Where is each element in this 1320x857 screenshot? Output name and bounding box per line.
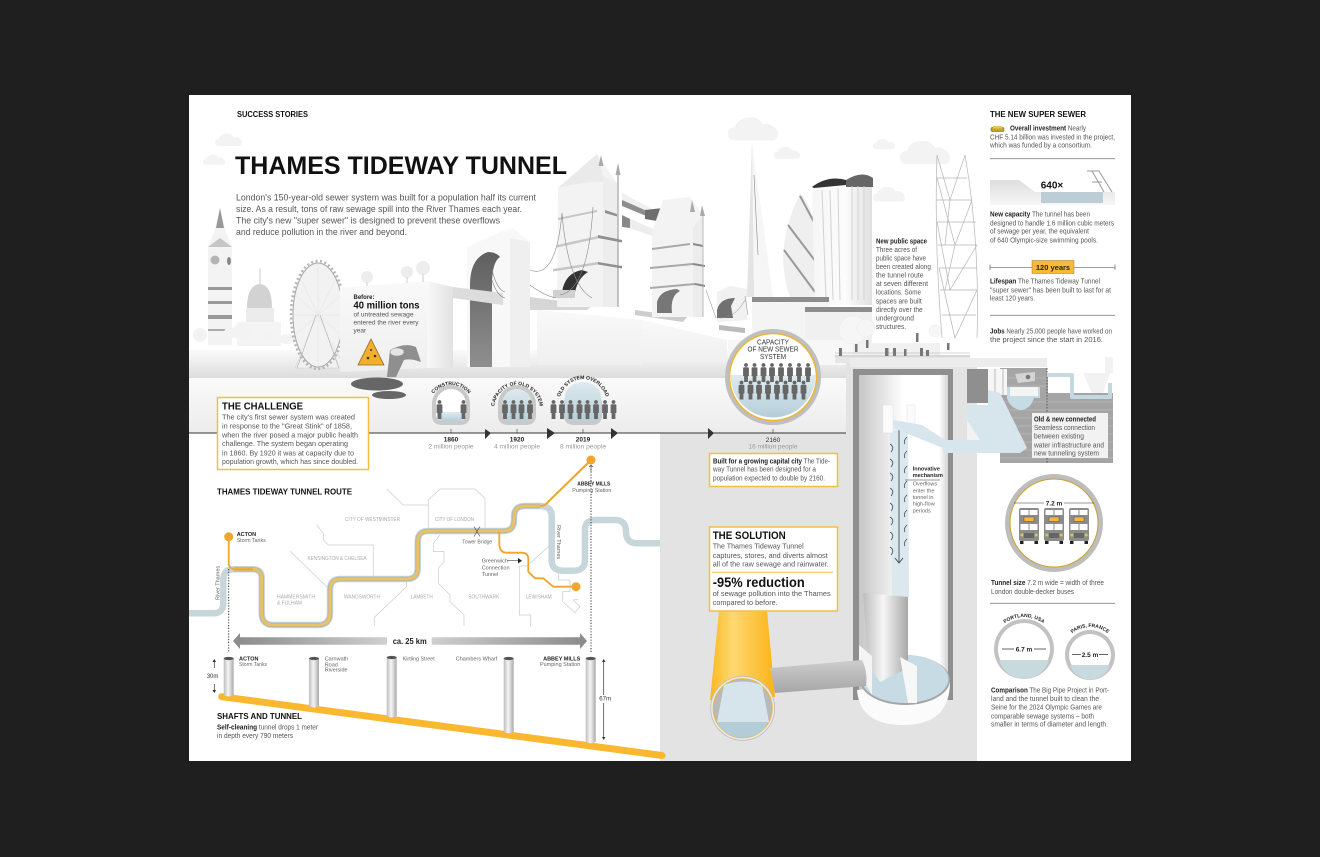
callout: new public space: at seven different <box>876 281 928 288</box>
tunnel profile: shaft labels: Road <box>325 662 338 668</box>
callout: old and new connected: water infrastructure and <box>1033 442 1104 449</box>
tunnel profile: shaft labels: ACTON <box>239 657 258 663</box>
distance arrow: ca. 25 km <box>233 633 587 649</box>
section: solution background <box>660 363 977 761</box>
icon: Tower Bridge marker <box>474 526 480 536</box>
milestone: 1860 construction: CONSTRUCTION <box>432 382 471 394</box>
route map: borough names: CITY OF LONDON <box>435 517 474 523</box>
public square platform with people <box>835 333 970 363</box>
route map: terminus dots <box>224 456 595 591</box>
callout: old and new connected: new tunneling system <box>1034 451 1099 458</box>
dimension: 30m <box>207 659 218 693</box>
page background <box>189 95 1131 761</box>
text: overall investment: CHF 5.14 billion was invested in the project, <box>990 134 1115 141</box>
white pipes <box>988 369 1007 395</box>
callout: new public space: the tunnel route <box>876 273 924 280</box>
divider <box>990 159 1115 603</box>
icon: gold bars <box>991 126 1004 132</box>
callout: innovative mechanism <box>905 466 943 514</box>
river base blocks <box>537 310 727 365</box>
Tower Bridge north tower <box>553 154 622 307</box>
milestone: 2160 capacity of new sewer system: SYSTEM <box>760 352 786 361</box>
text: lifespan: "super sewer" has been built to last for at <box>990 287 1111 294</box>
route map: main tunnel <box>229 460 591 625</box>
text: new capacity <box>990 212 1114 244</box>
callout: new public space: locations. Some <box>876 290 921 297</box>
text: new capacity: of sewage per year, the equivalent <box>990 229 1089 236</box>
route map: borough names: KENSINGTON & CHELSEA <box>308 556 367 562</box>
Tower Bridge south tower <box>650 197 705 317</box>
milestone: 1860 construction <box>428 382 474 450</box>
Tower Bridge walkways <box>622 193 692 238</box>
milestone: 2160 capacity of new sewer system: 16 million people <box>748 444 798 450</box>
ground plane left <box>189 350 849 378</box>
trees by public square <box>839 316 941 344</box>
callout: 40 million tons <box>354 295 420 334</box>
callout: innovative mechanism: tunnel in <box>913 495 933 501</box>
callout: new public space: public space have <box>876 256 926 263</box>
milestone: 2160 capacity of new sewer system: 2160 <box>766 437 781 444</box>
text: new capacity: of 640 Olympic-size swimming pools. <box>990 237 1098 244</box>
callout: old and new connected: Old & new connected <box>1034 416 1096 423</box>
panel: the challenge: challenge. The system began operating <box>222 439 348 448</box>
tunnel profile: sloped yellow tunnel <box>222 697 662 756</box>
diagram: Portland pipe <box>994 614 1054 679</box>
distance arrow: ca. 25 km: ca. 25 km <box>393 636 427 646</box>
dimension dashes <box>229 466 591 652</box>
panel: the challenge: in response to the "Great Stink" of 1858, <box>222 421 352 430</box>
route map: borough names: LAMBETH <box>411 594 433 600</box>
light band above timeline <box>189 378 849 433</box>
milestone: 1920 capacity of old system: 4 million people <box>494 444 540 450</box>
tunnel profile: shaft labels: ABBEY MILLS <box>543 657 581 663</box>
trees on wall <box>361 261 430 286</box>
icon: St Paul's dome <box>237 268 281 346</box>
icon: Walkie Talkie tower <box>812 174 873 305</box>
text: overall investment: Overall investment Nearly <box>1010 126 1086 133</box>
callout: innovative mechanism: Innovative <box>913 466 940 472</box>
panel: the challenge: THE CHALLENGE <box>222 400 303 412</box>
route map: labels: Connection <box>482 566 510 572</box>
panel: the challenge: when the river posed a major public health <box>221 430 358 439</box>
water column <box>890 430 909 597</box>
route map: labels <box>216 482 611 600</box>
callout: built for a growing capital city: Built for a growing capital city The Tide- <box>713 458 831 465</box>
diagram: Portland pipe: PORTLAND, USA <box>1003 614 1044 624</box>
callout: new public space: Three acres of <box>876 247 917 254</box>
panel: the solution: -95% reduction <box>713 574 805 590</box>
callout: 40 million tons: 40 million tons <box>354 300 420 312</box>
callout: built for a growing capital city: population expected to double by 2160. <box>713 475 825 482</box>
panel: the challenge <box>218 398 368 470</box>
route map: borough names: HAMMERSMITH <box>277 594 315 600</box>
text: comparison: Comparison The Big Pipe Project in Port- <box>991 687 1110 694</box>
icon: pool comparison: 640× <box>1041 181 1063 192</box>
heading: route: THAMES TIDEWAY TUNNEL ROUTE <box>217 486 352 496</box>
intro text <box>236 192 536 238</box>
callout: new public space <box>876 239 931 331</box>
timeline axis <box>189 432 846 434</box>
diagram: Paris pipe: PARIS, FRANCE <box>1070 624 1110 634</box>
tunnel profile: shaft labels: Kirtling Street <box>403 657 435 663</box>
drop-shaft concrete <box>863 593 908 682</box>
route map: borough names: CITY OF WESTMINSTER <box>345 517 400 523</box>
heading: the new super sewer: THE NEW SUPER SEWER <box>990 110 1086 119</box>
text: comparison: comparable sewage systems – both <box>991 713 1094 720</box>
route map: small arrows <box>507 465 593 564</box>
lifespan bar: 120 years: 120 years <box>1036 263 1070 272</box>
milestone: 2019 old system overload: 2019 <box>576 436 591 444</box>
panel: the challenge: The city's first sewer system was created <box>222 412 355 422</box>
dimension: 30m: 30m <box>207 674 218 680</box>
route map: labels: ACTON <box>237 532 256 538</box>
swirl arrows <box>890 437 907 555</box>
panel: the solution: of sewage pollution into the Thames <box>713 589 831 598</box>
trees left <box>193 323 295 344</box>
text: jobs: the project since the start in 2016. <box>990 337 1103 344</box>
icon: sewage outfall and spill <box>351 345 421 399</box>
route map: borough names: & FULHAM <box>277 600 302 606</box>
text: comparison: smaller in terms of diameter and length. <box>991 722 1108 729</box>
callout: 40 million tons: Before: <box>354 295 374 301</box>
text: tunnel size <box>991 580 1104 596</box>
intro text: London's 150-year-old sewer system was built for a population half its current <box>236 192 536 204</box>
milestone: 2160 capacity of new sewer system: OF NEW SEWER <box>748 345 799 354</box>
tunnel profile: shafts <box>224 656 596 743</box>
route map: labels: River Thames <box>216 566 222 600</box>
callout: new public space: underground <box>876 315 914 322</box>
text: jobs <box>990 328 1112 344</box>
text: overall investment: which was funded by a consortium. <box>989 143 1092 150</box>
route map: labels: Tower Bridge <box>462 540 492 546</box>
intro text: and reduce pollution in the river and beyond. <box>236 227 407 238</box>
timeline arrows <box>451 428 773 439</box>
diagram: tunnel size with buses <box>1005 474 1103 572</box>
callout: innovative mechanism: mechanism <box>913 473 943 479</box>
callout: built for a growing capital city <box>710 454 838 486</box>
route map: borough boundaries <box>290 489 580 626</box>
text: new capacity: New capacity The tunnel has been <box>990 212 1090 219</box>
text: tunnel size: Tunnel size 7.2 m wide = width of three <box>991 580 1104 587</box>
panel: the solution: all of the raw sewage and rainwater. <box>713 560 829 569</box>
low river wall block <box>340 281 453 372</box>
callout: 40 million tons: of untreated sewage <box>354 312 414 319</box>
flow arrow <box>898 430 900 562</box>
route map: borough names: WANDSWORTH <box>344 594 380 600</box>
route map: labels: Greenwich <box>482 558 508 564</box>
right white column <box>977 367 1131 761</box>
small approach tower <box>706 286 748 333</box>
icon: pool comparison <box>990 171 1115 205</box>
tunnel profile: shaft labels: Chambers Wharf <box>456 657 498 663</box>
text: tunnel size: London double-decker buses <box>991 589 1074 596</box>
callout: 40 million tons: entered the river every <box>354 320 419 326</box>
Tower Bridge south pier with arch <box>453 228 593 367</box>
illustration: old and new sewer connection <box>893 357 1118 463</box>
text: new capacity: designed to handle 1.6 million cubic meters <box>990 220 1114 227</box>
dark chamber <box>967 369 988 403</box>
diagram: Paris pipe <box>1065 624 1115 680</box>
icon: The Gherkin <box>783 193 817 297</box>
route map: labels: River Thames <box>555 525 561 559</box>
milestone: 1920 capacity of old system: CAPACITY OF OLD SYSTEM <box>491 382 544 406</box>
milestone: 1920 capacity of old system: 1920 <box>510 436 525 444</box>
intro text: size. As a result, tons of raw sewage spill into the River Thames each year. <box>236 204 522 215</box>
icon: warning sign <box>358 339 384 365</box>
callout: new public space: New public space <box>876 239 927 246</box>
milestone: 2160 capacity of new sewer system <box>725 329 821 450</box>
panel: the challenge: in 1860. By 1920 it was at capacity due to <box>222 448 354 457</box>
tunnel profile: shaft labels: Riverside <box>325 668 348 674</box>
connecting gray pipe <box>770 660 866 693</box>
dimension: 67m: 67m <box>599 696 611 702</box>
text: shafts and tunnel: Self-cleaning tunnel drops 1 meter <box>217 724 319 732</box>
route map: borough names: LEWISHAM <box>526 594 552 600</box>
milestone: 1920 capacity of old system <box>491 382 544 450</box>
callout: innovative mechanism: enter the <box>913 488 934 494</box>
incoming sewer pipe <box>893 390 1027 453</box>
icon: Big Ben <box>208 208 232 345</box>
large yellow tunnel section <box>710 611 775 740</box>
route map: labels: Pumping Station <box>572 488 611 494</box>
callout: 40 million tons: year <box>354 327 367 334</box>
illustration: shaft cross-section <box>850 358 1047 725</box>
illustration: London skyline <box>189 142 978 378</box>
panel: the solution: compared to before. <box>713 598 778 607</box>
callout: innovative mechanism: high-flow <box>913 502 935 508</box>
text: shafts and tunnel: in depth every 790 meters <box>217 733 293 740</box>
route map: borough names: SOUTHWARK <box>468 594 500 600</box>
panel: the solution: THE SOLUTION <box>713 530 786 542</box>
tunnel profile: shaft labels: Storm Tanks <box>239 662 267 668</box>
text: lifespan: Lifespan The Thames Tideway Tunnel <box>990 279 1100 286</box>
diagram: Portland pipe: 6.7 m <box>1016 646 1033 654</box>
text: lifespan <box>990 279 1111 303</box>
city podium blocks <box>728 297 872 365</box>
text: comparison: Seine for the 2024 Olympic Games are <box>991 705 1102 712</box>
diagram: Paris pipe: 2.5 m <box>1082 652 1099 659</box>
dimension: 67m <box>599 659 611 740</box>
tunnel profile: shaft labels: Carnwath <box>325 657 348 663</box>
text: comparison <box>991 687 1110 729</box>
text: shafts and tunnel: SHAFTS AND TUNNEL <box>217 711 302 721</box>
text: jobs: Jobs Nearly 25,000 people have worked on <box>990 328 1112 335</box>
text: success stories label: SUCCESS STORIES <box>237 110 309 119</box>
route map: borough names <box>277 517 552 606</box>
panel: the challenge: population growth, which has since doubled. <box>222 457 358 466</box>
milestone: 2160 capacity of new sewer system: CAPACITY <box>757 338 789 346</box>
milestone: 1860 construction: 2 million people <box>428 444 474 450</box>
brick wall <box>1000 368 1113 463</box>
lifespan bar: 120 years <box>990 260 1115 274</box>
callout: new public space: been created along <box>876 264 931 271</box>
icon: The Shard <box>747 142 773 297</box>
diagram: tunnel size with buses: 7.2 m <box>1046 500 1063 508</box>
milestone: 2019 old system overload: 8 million people <box>560 444 606 450</box>
route map: labels: ABBEY MILLS <box>577 482 611 488</box>
callout: built for a growing capital city: way Tunnel has been designed for a <box>712 467 816 474</box>
text: lifespan: least 120 years. <box>990 296 1035 303</box>
text: overall investment <box>989 126 1115 150</box>
callout: new public space: directly over the <box>876 307 923 314</box>
connecting pipe and toilet <box>1047 375 1110 397</box>
title: THAMES TIDEWAY TUNNEL <box>235 152 567 180</box>
callout: new public space: structures. <box>876 324 906 331</box>
milestone: 2019 old system overload: OLD SYSTEM OVERLOAD <box>557 376 609 396</box>
callout: innovative mechanism: Overflows <box>913 482 937 488</box>
tunnel profile: shaft labels: Pumping Station <box>540 662 580 668</box>
panel: the solution <box>710 527 838 611</box>
callout: old and new connected: between existing <box>1034 434 1084 441</box>
tunnel profile: shaft labels <box>239 657 581 674</box>
text: comparison: land and the tunnel built to clean the <box>991 696 1099 703</box>
panel: the solution: captures, stores, and diverts almost <box>713 551 829 560</box>
route map: labels: Storm Tanks <box>237 538 266 544</box>
callout: innovative mechanism: periods <box>913 508 931 514</box>
icon: lattice tower <box>936 155 978 338</box>
callout: old and new connected <box>1032 413 1108 458</box>
milestone: 1860 construction: 1860 <box>444 436 459 444</box>
route map: labels: Tunnel <box>482 572 498 578</box>
clouds <box>203 117 950 202</box>
callout: old and new connected: Seamless connection <box>1034 425 1095 432</box>
suspension cables <box>492 207 593 298</box>
callout: new public space: spaces are built <box>876 298 922 305</box>
text: shafts and tunnel <box>217 711 319 740</box>
icon: London Eye <box>291 261 345 369</box>
panel: the solution: The Thames Tideway Tunnel <box>713 542 804 551</box>
intro text: The city's new "super sewer" is designed to prevent these overflows <box>236 216 500 227</box>
milestone: 2019 old system overload <box>550 376 616 450</box>
route map: River Thames <box>189 506 660 625</box>
